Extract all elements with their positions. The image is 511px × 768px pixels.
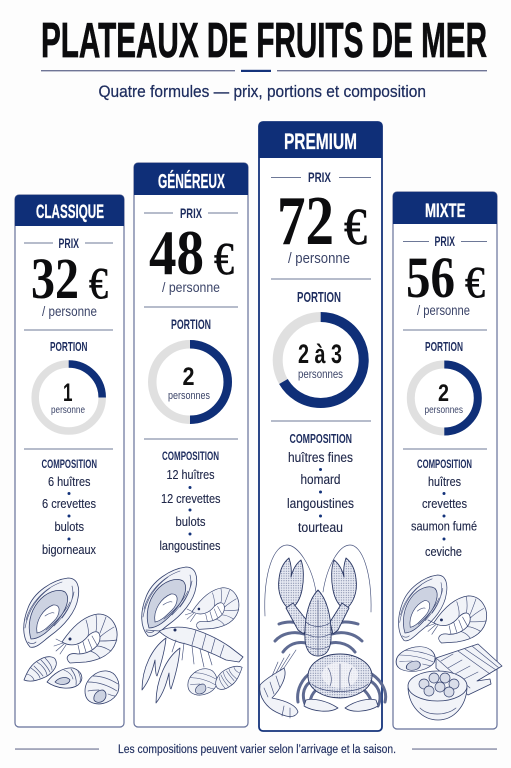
donut: 1 personne: personne (51, 404, 85, 416)
composition list: 12 crevettes (161, 492, 220, 506)
header: Mixte (393, 192, 497, 224)
portion label: PORTION (425, 339, 463, 354)
composition list: bulots (54, 520, 84, 534)
composition list (287, 431, 354, 535)
donut: 2 personnes (152, 344, 228, 420)
salmon (436, 644, 502, 695)
portion label: PORTION (50, 339, 88, 354)
price label: PRIX (180, 205, 202, 221)
lobster (265, 545, 371, 656)
composition list: COMPOSITION (290, 431, 352, 446)
price: 32 euros: 32 (31, 246, 79, 311)
composition list: langoustines (287, 496, 354, 511)
header: Classique: CLASSIQUE (36, 202, 104, 223)
price: 56 euros: 56 (406, 245, 455, 310)
composition list: langoustines (160, 539, 220, 553)
header: Mixte: MIXTE (425, 201, 466, 222)
illustration: lobster, crab, shrimp (260, 545, 386, 718)
price label (24, 236, 113, 251)
price label (271, 169, 371, 185)
panel: Généreux (134, 163, 248, 727)
illustration: oyster, shrimp, shell, salmon, ceviche bowl (396, 575, 502, 720)
langoustine (142, 627, 243, 703)
header: Classique (15, 195, 124, 226)
illustration: oyster, shrimp, whelks (24, 578, 119, 704)
subtitle: Quatre formules — prix, portions et composition (98, 82, 426, 101)
price: 56 euros: € (465, 258, 485, 307)
price label (403, 234, 487, 249)
donut: 1 personne (35, 364, 102, 431)
composition list: 12 huîtres (166, 468, 214, 482)
price label: PRIX (58, 236, 79, 251)
panel: Classique (15, 195, 124, 727)
composition list (411, 457, 477, 559)
composition list: huîtres fines (288, 450, 353, 465)
donut: 2 personnes: personnes (424, 404, 463, 416)
donut: 2 à 3 personnes (278, 317, 364, 403)
composition list: COMPOSITION (42, 457, 97, 471)
price: 48 euros: € (214, 233, 234, 284)
price label: PRIX (434, 234, 455, 249)
composition list: homard (300, 472, 340, 487)
crab (298, 654, 386, 711)
composition list (42, 457, 97, 557)
per person: / personne (162, 279, 220, 295)
price: 32 euros: € (89, 259, 108, 308)
composition list: 6 huîtres (48, 475, 90, 489)
header: Généreux: GÉNÉREUX (158, 170, 225, 193)
header: Premium (259, 122, 382, 158)
donut: 2 personnes: 2 (182, 363, 194, 391)
ceviche bowl (408, 671, 467, 720)
composition list: COMPOSITION (417, 457, 472, 471)
donut: 2 personnes: personnes (168, 390, 210, 402)
price label: PRIX (308, 169, 331, 185)
footer note: Les compositions peuvent varier selon l’arrivage et la saison. (118, 744, 396, 756)
donut: 1 personne: 1 (63, 379, 73, 407)
composition list: COMPOSITION (162, 449, 219, 463)
header: Premium: PREMIUM (284, 129, 357, 154)
donut: 2 à 3 personnes: personnes (298, 367, 343, 381)
price: 48 euros: 48 (149, 218, 204, 288)
header: Généreux (134, 163, 248, 195)
per person: / personne (288, 250, 350, 267)
composition list: huîtres (428, 475, 461, 489)
composition list: saumon fumé (411, 520, 477, 534)
composition list: bulots (176, 515, 206, 529)
price: 72 euros: € (344, 199, 367, 256)
composition list: ceviche (425, 545, 462, 559)
panel: Premium (259, 122, 386, 731)
donut: 2 personnes: 2 (438, 380, 449, 407)
portion label: PORTION (171, 316, 211, 332)
price: 72 euros: 72 (277, 183, 334, 260)
composition list (160, 449, 220, 553)
illustration: oyster, shrimp, langoustine, whelks (142, 567, 243, 703)
small shrimp (260, 650, 298, 718)
per person: / personne (42, 304, 97, 319)
donut: 2 à 3 personnes: 2 à 3 (298, 339, 342, 369)
portion label: PORTION (297, 289, 341, 306)
composition list: bigorneaux (42, 543, 97, 557)
composition list: tourteau (298, 520, 343, 535)
composition list: 6 crevettes (42, 497, 96, 511)
price label (144, 205, 238, 221)
panel: Mixte (393, 192, 502, 729)
title divider (41, 70, 487, 72)
donut: 2 personnes (411, 364, 478, 432)
per person: / personne (417, 303, 470, 318)
composition list: crevettes (422, 497, 467, 511)
